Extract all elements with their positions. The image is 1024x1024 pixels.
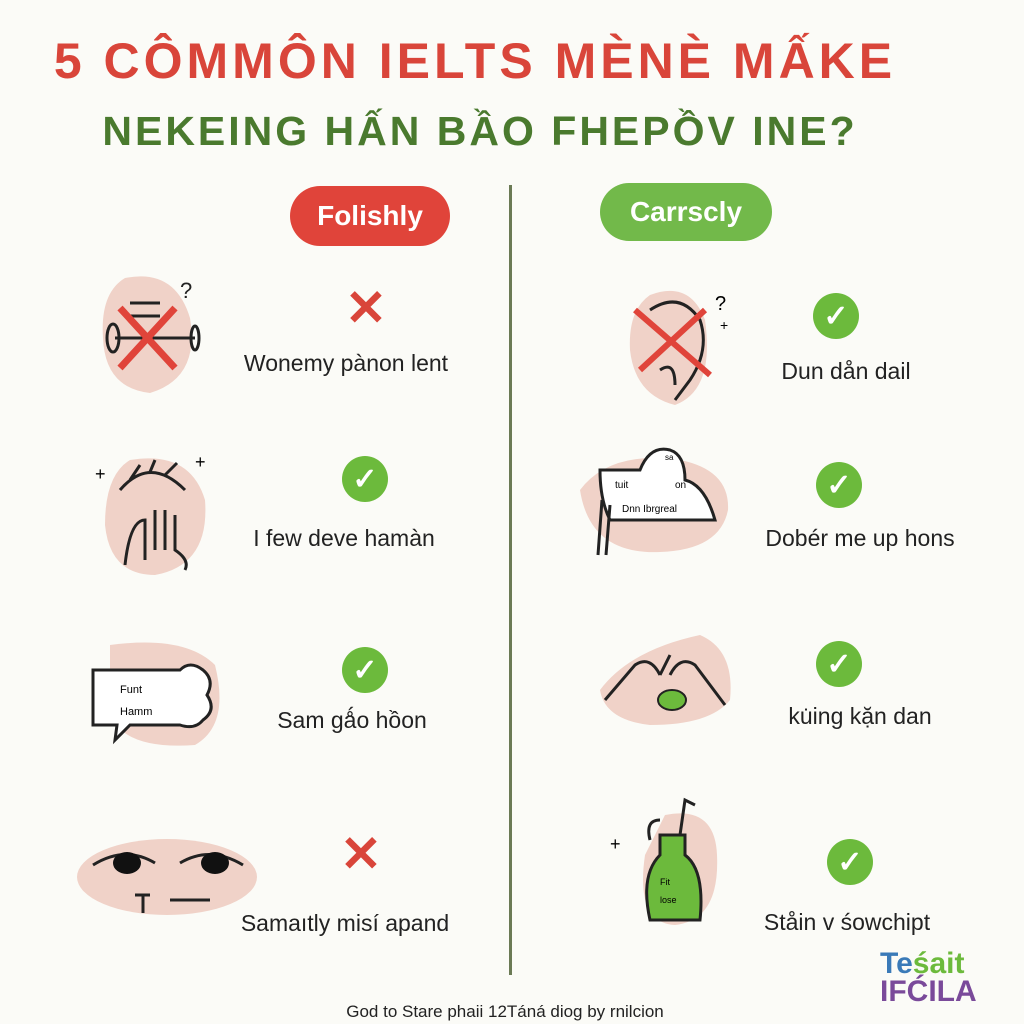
pill: Folishly xyxy=(290,186,450,246)
right check 1: ✓ xyxy=(823,300,849,332)
right icon 2: Dnn Ibrgreal xyxy=(622,504,677,515)
mark check 2 xyxy=(342,456,388,502)
left icon 3: Hamm xyxy=(120,706,152,718)
title line 1: 5 CÔMMÔN IELTS MÈNÈ MẤKE xyxy=(54,33,896,89)
right icon 1: ? xyxy=(715,293,726,315)
right text 2: Dobér me up hons xyxy=(765,525,955,551)
right icon 1: + xyxy=(720,317,728,333)
right check 4 xyxy=(827,839,873,885)
pill: Carrscly xyxy=(600,183,772,241)
pill: Folishly: Folishly xyxy=(317,200,423,231)
right text 4: Ståin v śowchipt xyxy=(764,909,930,935)
right check 3 xyxy=(816,641,862,687)
logo: Teśait xyxy=(880,947,964,980)
text 2: I few deve hamàn xyxy=(253,525,435,551)
right icon 1 xyxy=(630,290,728,405)
divider xyxy=(509,185,512,975)
right check 3: ✓ xyxy=(826,648,852,680)
mark x 1: ✕ xyxy=(345,280,387,336)
right icon 4: Fit xyxy=(660,877,670,887)
left icon 3: Funt xyxy=(120,684,142,696)
right icon 4: + xyxy=(610,834,621,854)
left icon 2: + xyxy=(195,452,206,472)
logo xyxy=(880,947,977,1008)
left icon 1 xyxy=(102,276,200,393)
text 3: Sam gǻo hồon xyxy=(277,707,427,733)
right icon 2 xyxy=(580,448,728,556)
left icon 1: ? xyxy=(180,278,192,303)
right check 1 xyxy=(813,293,859,339)
mark check 3 xyxy=(342,647,388,693)
text 1: Wonemy pànon lent xyxy=(244,350,448,376)
right icon 3 xyxy=(600,635,731,725)
pill: Carrscly: Carrscly xyxy=(630,196,742,227)
right icon 2: sa xyxy=(665,453,674,462)
right check 2 xyxy=(816,462,862,508)
right check 2: ✓ xyxy=(826,468,852,502)
text 4: Samaıtly misí apand xyxy=(241,910,449,936)
right icon 4 xyxy=(610,798,718,925)
right check 4: ✓ xyxy=(837,846,863,878)
right text 3: ku̇ing kặn dan xyxy=(788,703,932,729)
right icon 2: tuit xyxy=(615,480,629,491)
footer text: God to Stare phaii 12Táná diog by rnilcion xyxy=(346,1002,664,1021)
right icon 4: lose xyxy=(660,895,677,905)
mark check 3: ✓ xyxy=(352,654,378,686)
left icon 2: + xyxy=(95,464,106,484)
left icon 3 xyxy=(92,642,220,746)
right text 1: Dun dån dail xyxy=(781,358,911,384)
right icon 2: on xyxy=(675,480,686,491)
title line 2: NEKEING HẤN BẦO FHEPỒV INE? xyxy=(102,108,858,154)
mark check 2: ✓ xyxy=(352,462,378,496)
logo: IFĆILA xyxy=(880,975,977,1008)
left icon 4 xyxy=(77,839,257,915)
mark x 4: ✕ xyxy=(340,826,382,882)
left icon 2 xyxy=(95,452,206,575)
